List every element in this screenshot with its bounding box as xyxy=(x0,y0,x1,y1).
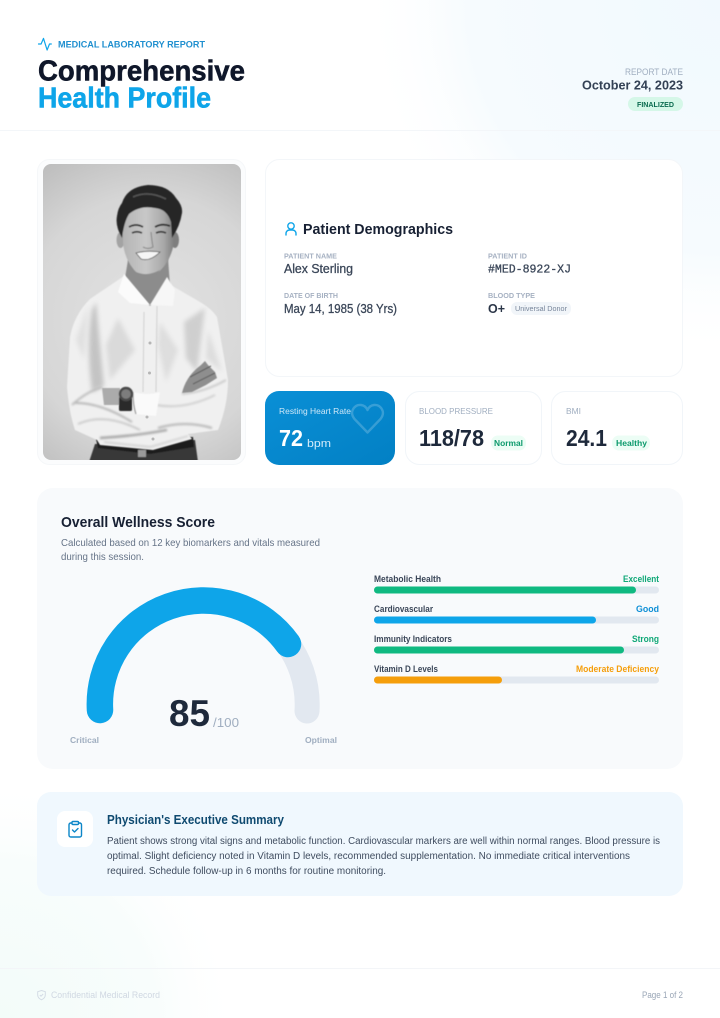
report category label: MEDICAL LABORATORY REPORT xyxy=(58,39,205,49)
bar: immunity indicators: Strong xyxy=(632,634,659,644)
bar: vitamin d levels xyxy=(374,664,659,684)
footer: Confidential Medical Record xyxy=(51,990,160,1000)
card: bmi: 24.1 xyxy=(566,425,607,451)
head xyxy=(116,185,182,282)
gauge value: 85 xyxy=(169,693,210,734)
report date block: October 24, 2023 xyxy=(582,78,683,92)
field: patient name: PATIENT NAME xyxy=(284,254,337,260)
footer: Page 1 of 2 xyxy=(642,990,683,1000)
card: resting heart rate: Resting Heart Rate xyxy=(279,406,351,416)
card: resting heart rate xyxy=(265,391,395,465)
card: resting heart rate: 72 xyxy=(279,425,303,451)
card: blood pressure: Normal xyxy=(494,438,523,448)
smile xyxy=(136,251,160,260)
bar: immunity indicators: Immunity Indicators xyxy=(374,634,452,644)
bar: metabolic health: Metabolic Health xyxy=(374,574,441,584)
gauge chart xyxy=(70,600,337,745)
field: patient name: Alex Sterling xyxy=(284,262,353,276)
icon: pulse xyxy=(38,38,51,50)
card: bmi xyxy=(552,392,682,464)
card: blood pressure xyxy=(406,392,542,464)
summary text: Patient shows strong vital signs and metabolic function. Cardiovascular markers are well within normal ranges. Blood pressure is xyxy=(107,836,660,847)
bar: vitamin d levels: Vitamin D Levels xyxy=(374,664,438,674)
brows and eyes xyxy=(129,225,170,227)
gauge chart: Optimal xyxy=(305,735,337,745)
gauge chart: Critical xyxy=(70,735,99,745)
field: blood type: O+ xyxy=(488,301,505,316)
card: blood pressure: 118/78 xyxy=(419,425,484,451)
icon: person xyxy=(286,223,296,235)
field: blood type: Universal Donor xyxy=(515,306,568,313)
bar: vitamin d levels: Moderate Deficiency xyxy=(576,664,659,674)
panel: overall wellness score xyxy=(37,488,683,769)
summary text: required. Schedule follow-up in 6 months for routine monitoring. xyxy=(107,866,386,877)
hand xyxy=(182,361,217,393)
report date block xyxy=(582,67,683,111)
status badge: FINALIZED xyxy=(637,102,674,109)
title: Health Profile xyxy=(38,82,211,114)
field: patient id xyxy=(488,254,571,276)
field: blood type xyxy=(488,293,571,316)
neck xyxy=(124,258,170,310)
field: patient name xyxy=(284,254,353,276)
bar: immunity indicators xyxy=(374,634,659,654)
card: resting heart rate: bpm xyxy=(307,438,331,450)
icon: heart xyxy=(352,405,383,432)
heading: Patient Demographics xyxy=(303,221,453,238)
bar: metabolic health: Excellent xyxy=(623,574,659,584)
placket and buttons xyxy=(143,306,157,392)
heading: Physician's Executive Summary xyxy=(107,813,284,827)
card: bmi: Healthy xyxy=(616,438,647,448)
forearm, cuff and watch xyxy=(102,387,160,416)
footer xyxy=(0,968,720,1000)
field: date of birth: DATE OF BIRTH xyxy=(284,293,338,300)
report date block: REPORT DATE xyxy=(625,67,683,77)
card: blood pressure: BLOOD PRESSURE xyxy=(419,406,493,416)
panel: physician's executive summary xyxy=(37,792,683,896)
bar: cardiovascular: Cardiovascular xyxy=(374,604,433,614)
header xyxy=(0,38,720,131)
icon: shield xyxy=(38,990,45,1000)
shirt xyxy=(67,274,228,450)
title: Comprehensive xyxy=(38,56,245,88)
panel: patient demographics xyxy=(266,160,682,376)
panel: patient photo xyxy=(38,160,246,464)
icon: clipboard check xyxy=(57,811,93,847)
summary text: optimal. Slight deficiency noted in Vitamin D levels, recommended supplementation. No immediate critical interventions xyxy=(107,851,630,862)
description: Calculated based on 12 key biomarkers and vitals measured xyxy=(61,538,320,549)
hair xyxy=(117,185,182,238)
field: date of birth xyxy=(284,293,397,316)
field: date of birth: May 14, 1985 (38 Yrs) xyxy=(284,302,397,316)
field: blood type: BLOOD TYPE xyxy=(488,293,535,300)
card: bmi: BMI xyxy=(566,406,581,416)
heading: Overall Wellness Score xyxy=(61,514,215,531)
trousers xyxy=(89,437,198,462)
description: during this session. xyxy=(61,552,144,563)
bar: cardiovascular xyxy=(374,604,659,624)
bar: metabolic health xyxy=(374,574,659,594)
collar xyxy=(118,274,150,305)
field: patient id: PATIENT ID xyxy=(488,254,527,260)
field: patient id: #MED-8922-XJ xyxy=(488,262,571,276)
gauge chart: /100 xyxy=(213,715,239,730)
folds under crossed arms xyxy=(72,380,226,447)
bar: cardiovascular: Good xyxy=(636,604,659,614)
